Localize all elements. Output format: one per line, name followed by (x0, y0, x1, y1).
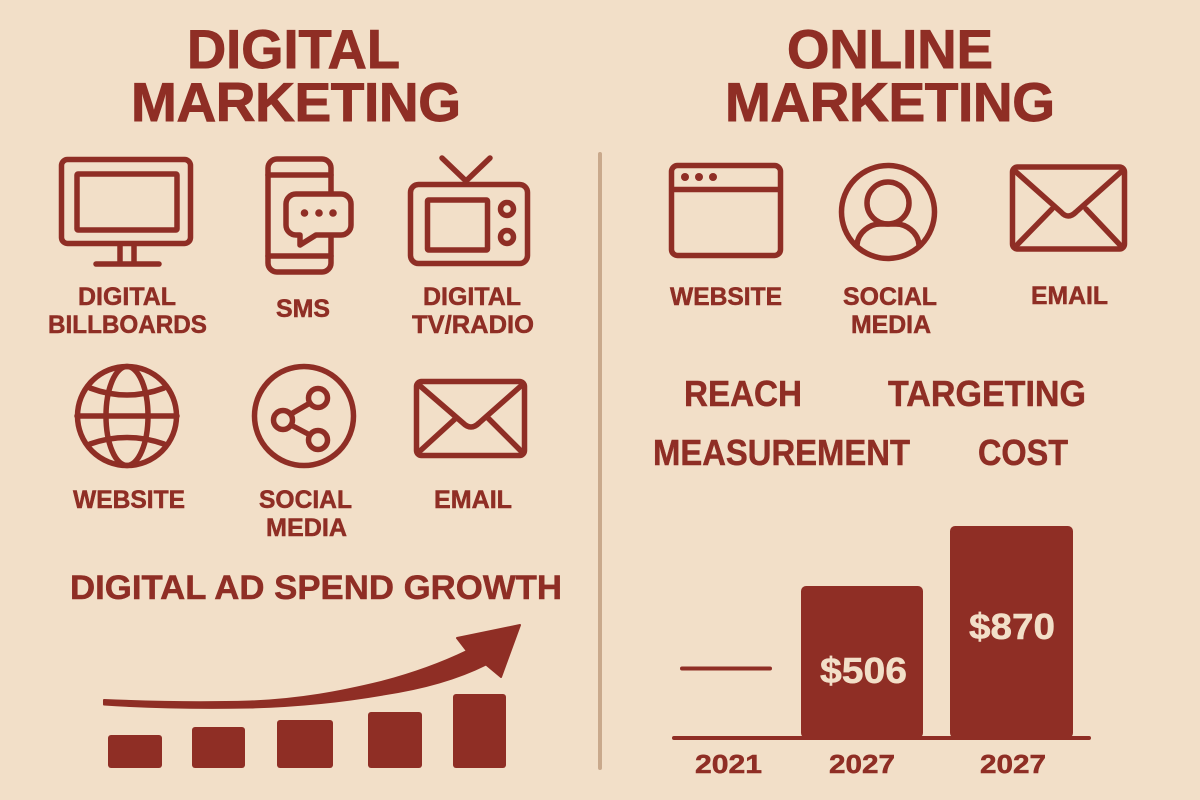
icon: browser window (672, 166, 780, 256)
arrow: growth trend (104, 625, 520, 708)
label: digital billboards: DIGITAL (78, 283, 176, 311)
axis label: 2021: 2021 (695, 749, 762, 779)
text: cost: COST (978, 432, 1068, 473)
bar: 506 (801, 586, 923, 738)
bar 5 (453, 694, 506, 768)
bar 3 (277, 720, 333, 768)
icon: phone with sms bubble (268, 159, 351, 272)
heading: online marketing: ONLINE (787, 18, 993, 80)
text: measurement: MEASUREMENT (653, 432, 910, 473)
label: digital tv/radio: TV/RADIO (412, 311, 534, 339)
axis label: 2027 second: 2027 (980, 749, 1046, 779)
chart: growth bars with arrow (104, 625, 520, 768)
value: $506: $506 (820, 650, 907, 691)
value: $870: $870 (969, 606, 1055, 647)
label: social media (843, 283, 937, 339)
label: social media: SOCIAL (843, 283, 937, 311)
axis label: 2027: 2027 (829, 749, 895, 779)
label: website: WEBSITE (670, 283, 782, 311)
icon: user profile in circle (842, 166, 934, 258)
label: digital tv/radio: DIGITAL (423, 283, 521, 311)
label: digital billboards (48, 283, 207, 339)
heading: digital marketing: MARKETING (131, 71, 461, 133)
axis line (672, 736, 1091, 740)
text: reach: REACH (684, 373, 802, 414)
icon: email envelope (1012, 167, 1124, 249)
label: digital billboards: BILLBOARDS (48, 311, 207, 339)
label: social media (259, 486, 352, 542)
bar 4 (368, 712, 422, 768)
heading: digital ad spend growth: DIGITAL AD SPEND GROWTH (70, 569, 562, 607)
text: targeting: TARGETING (888, 373, 1086, 414)
label: sms: SMS (276, 295, 330, 323)
icon: email envelope (416, 382, 524, 456)
bar 2 (192, 727, 245, 768)
icon: digital billboard monitor (62, 160, 190, 264)
bar: 870 (950, 526, 1073, 738)
bar 1 (108, 735, 162, 768)
label: social media: MEDIA (266, 514, 347, 542)
heading: digital marketing: DIGITAL (187, 18, 400, 80)
label: website: WEBSITE (73, 486, 185, 514)
icon: tv with antenna (410, 158, 528, 264)
chart: online ad spend bars (672, 526, 1091, 779)
heading: online marketing: MARKETING (725, 71, 1055, 133)
label: social media: SOCIAL (259, 486, 352, 514)
icon: share in circle (254, 366, 354, 466)
heading: online marketing (725, 18, 1055, 133)
label: email: EMAIL (1031, 282, 1108, 310)
label: digital tv/radio (412, 283, 534, 339)
dash: 2021 placeholder (680, 666, 772, 670)
heading: digital marketing (131, 18, 461, 133)
icon: globe (77, 366, 177, 466)
label: social media: MEDIA (851, 311, 931, 339)
label: email: EMAIL (434, 486, 512, 514)
